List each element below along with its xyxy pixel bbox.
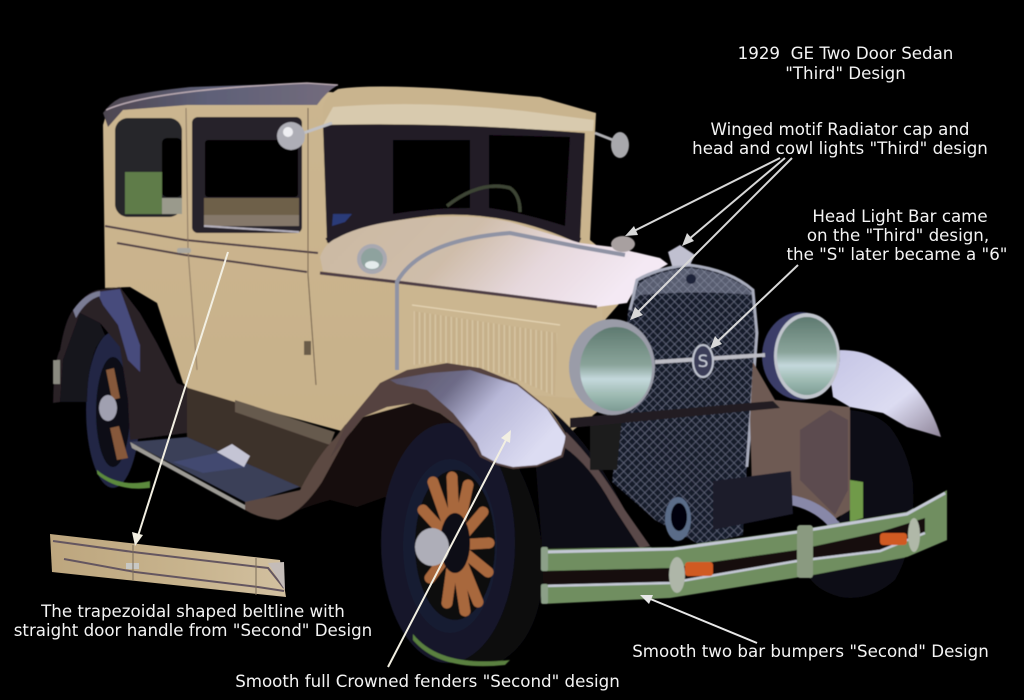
inset: beltline detail: [50, 534, 286, 597]
title: "Third" Design: [785, 64, 906, 83]
far front fender: [830, 350, 941, 437]
side mirror: [277, 122, 332, 150]
licence plate: [713, 471, 793, 530]
arrow: radiator cap: [682, 158, 785, 246]
arrow: crowned fenders: [388, 430, 511, 667]
near front tyre: [400, 422, 543, 664]
label: winged motif: Winged motif Radiator cap and: [711, 120, 969, 139]
right mirror: [595, 132, 629, 158]
title: 1929 GE Two Door Sedan: [738, 44, 953, 63]
label: beltline: straight door handle from "Second" Design: [14, 621, 372, 640]
arrow: head light bar: [710, 265, 798, 349]
rear fender: [53, 287, 187, 440]
label: beltline: The trapezoidal shaped beltline with: [41, 602, 345, 621]
illustration: 1929 sedan car: [53, 83, 947, 666]
right headlight: [762, 312, 840, 400]
label: head light bar: the "S" later became a "6": [787, 245, 1007, 264]
car body tan: [103, 92, 640, 440]
grass behind far tyre: [850, 480, 863, 522]
chrome hood strip: [397, 233, 625, 370]
far side splash apron: [750, 362, 850, 530]
label: head light bar: on the "Third" design,: [807, 226, 989, 245]
label: fenders: Smooth full Crowned fenders "Second" design: [235, 672, 620, 691]
roof: [103, 83, 338, 127]
arrow: head light: [630, 158, 792, 320]
rear side window: [115, 118, 182, 217]
head light bar with S emblem: S: [698, 352, 708, 372]
bumper: [541, 490, 947, 604]
door window: [192, 117, 302, 233]
label: bumpers: Smooth two bar bumpers "Second" Design: [632, 642, 989, 661]
windshield header and visor: [323, 86, 596, 131]
label: winged motif: head and cowl lights "Third" design: [692, 139, 988, 158]
running board: [130, 437, 300, 510]
hood top: [320, 217, 668, 307]
running board apron: [185, 387, 335, 490]
door latch: [304, 341, 311, 355]
label: head light bar: Head Light Bar came: [812, 207, 988, 226]
roof highlight: [106, 83, 338, 110]
windshield: [323, 124, 585, 243]
beltline mouldings and door seams: [105, 108, 597, 385]
front fender crown: [330, 363, 568, 469]
door handle: [177, 248, 191, 253]
hood side with louver panel: [398, 283, 603, 400]
crank hole: [665, 497, 691, 541]
rear tyre and wheel: [86, 332, 150, 489]
far cowl light: [611, 236, 635, 252]
head light bar with S emblem: [655, 345, 765, 377]
lower headlight bar: [570, 401, 780, 428]
arrow: cowl light: [625, 158, 780, 236]
left headlight: [569, 319, 655, 415]
arrow: beltline: [132, 252, 228, 546]
near front wheel: [381, 423, 515, 666]
arrow: bumpers: [640, 595, 757, 643]
front fender drop: [536, 407, 652, 548]
cowl light: [357, 244, 387, 274]
front fender skirt: [245, 403, 480, 520]
far front tyre: [808, 410, 913, 598]
dark frame post: [590, 417, 622, 470]
radiator cap: [668, 245, 695, 266]
grille shell: [612, 265, 757, 545]
